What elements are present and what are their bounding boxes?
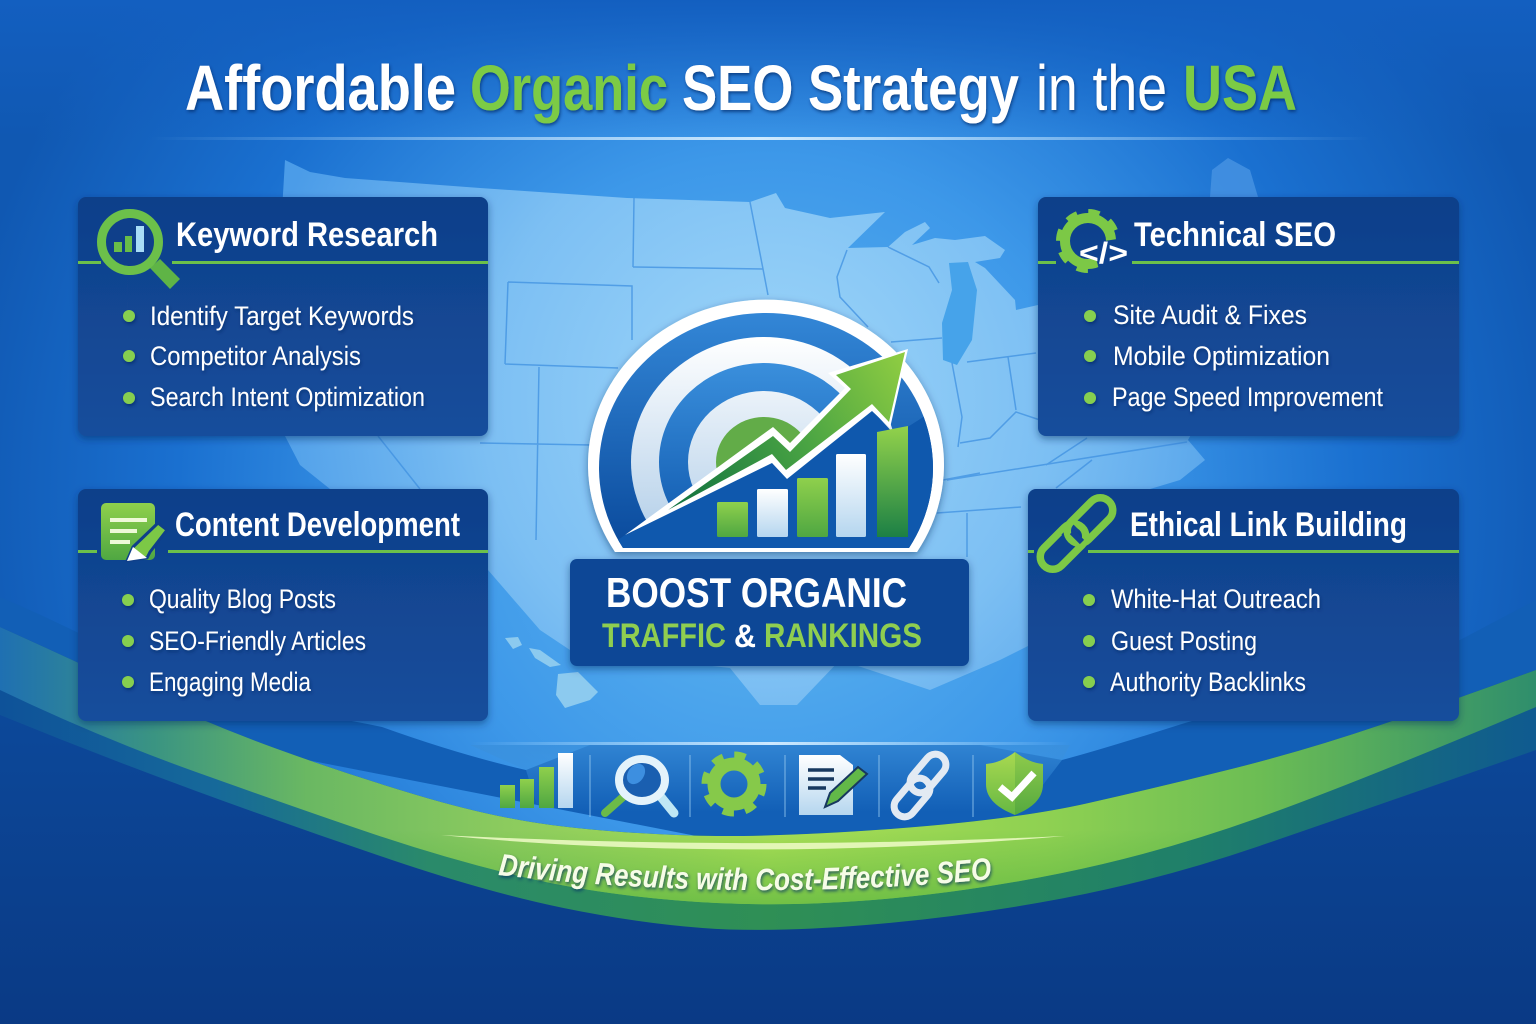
list: technical seo: Mobile Optimization bbox=[1113, 341, 1330, 371]
callout: boost organic traffic and rankings: RANKINGS bbox=[764, 617, 922, 655]
icon: gear bbox=[706, 756, 762, 812]
tagline: Driving Results with Cost-Effective SEO bbox=[498, 854, 994, 894]
darker blue swoosh above the green band bbox=[0, 597, 1536, 850]
list: keyword research: Competitor Analysis bbox=[150, 341, 361, 371]
green band: bright layer bbox=[0, 627, 1536, 904]
title: SEO Strategy bbox=[682, 52, 1019, 124]
callout: boost organic traffic and rankings: TRAFFIC bbox=[602, 617, 726, 655]
icon: shield with check bbox=[986, 752, 1043, 815]
list: technical seo: Page Speed Improvement bbox=[1112, 382, 1383, 412]
icon: magnifier with bars bbox=[102, 214, 180, 289]
icon: magnifier bbox=[605, 759, 674, 813]
panel: keyword research bbox=[78, 197, 488, 436]
map of the USA bbox=[275, 158, 1260, 708]
map: state lines bbox=[378, 198, 1187, 557]
heading: content development: Content Development bbox=[175, 506, 460, 544]
icon row bbox=[470, 742, 1070, 821]
icon: chain link bbox=[890, 750, 950, 821]
title: Affordable bbox=[185, 52, 456, 124]
icon: document with pencil bbox=[101, 503, 167, 561]
icon: chain link bbox=[1035, 493, 1118, 574]
list: keyword research: Identify Target Keywords bbox=[150, 301, 414, 331]
panel: content development bbox=[78, 489, 488, 721]
panel: technical seo bbox=[1038, 197, 1459, 436]
green band: dark lower layer bbox=[0, 627, 1536, 930]
heading: technical seo: Technical SEO bbox=[1134, 216, 1336, 254]
title: Organic bbox=[470, 52, 668, 124]
list: technical seo: Site Audit & Fixes bbox=[1113, 300, 1307, 330]
map: maine bbox=[1210, 158, 1258, 197]
list: content development: SEO-Friendly Articles bbox=[149, 626, 366, 656]
list: ethical link building: Authority Backlinks bbox=[1110, 667, 1306, 697]
title bbox=[185, 52, 1297, 124]
heading: ethical link building: Ethical Link Building bbox=[1130, 506, 1407, 544]
arrow: growth bbox=[625, 349, 908, 535]
icon: bars bbox=[500, 753, 573, 808]
list: ethical link building: White-Hat Outreach bbox=[1111, 584, 1321, 614]
callout: boost organic traffic and rankings bbox=[570, 559, 969, 666]
list: content development: Quality Blog Posts bbox=[149, 584, 336, 614]
list: keyword research: Search Intent Optimization bbox=[150, 382, 425, 412]
bar chart bbox=[717, 426, 908, 537]
list: technical seo bbox=[1084, 300, 1383, 412]
list: ethical link building: Guest Posting bbox=[1111, 626, 1257, 656]
title: in the bbox=[1036, 52, 1167, 124]
icon: document with pencil bbox=[799, 755, 867, 815]
map: hawaii bbox=[505, 637, 598, 708]
list: content development bbox=[122, 584, 366, 697]
panel: ethical link building bbox=[1028, 489, 1459, 721]
heading: keyword research: Keyword Research bbox=[176, 216, 438, 254]
icon: gear with code: </> bbox=[1079, 237, 1128, 270]
list: content development: Engaging Media bbox=[149, 667, 312, 697]
list: ethical link building bbox=[1083, 584, 1321, 697]
callout: boost organic traffic and rankings: BOOST ORGANIC bbox=[606, 569, 907, 616]
map: great lakes bbox=[942, 262, 977, 365]
list: keyword research bbox=[123, 301, 425, 412]
callout: boost organic traffic and rankings: & bbox=[734, 618, 756, 654]
lower area bbox=[0, 627, 1536, 1024]
emblem: target with growth arrow bbox=[588, 300, 950, 587]
icon: gear with code bbox=[1060, 213, 1128, 270]
title: USA bbox=[1183, 52, 1297, 124]
